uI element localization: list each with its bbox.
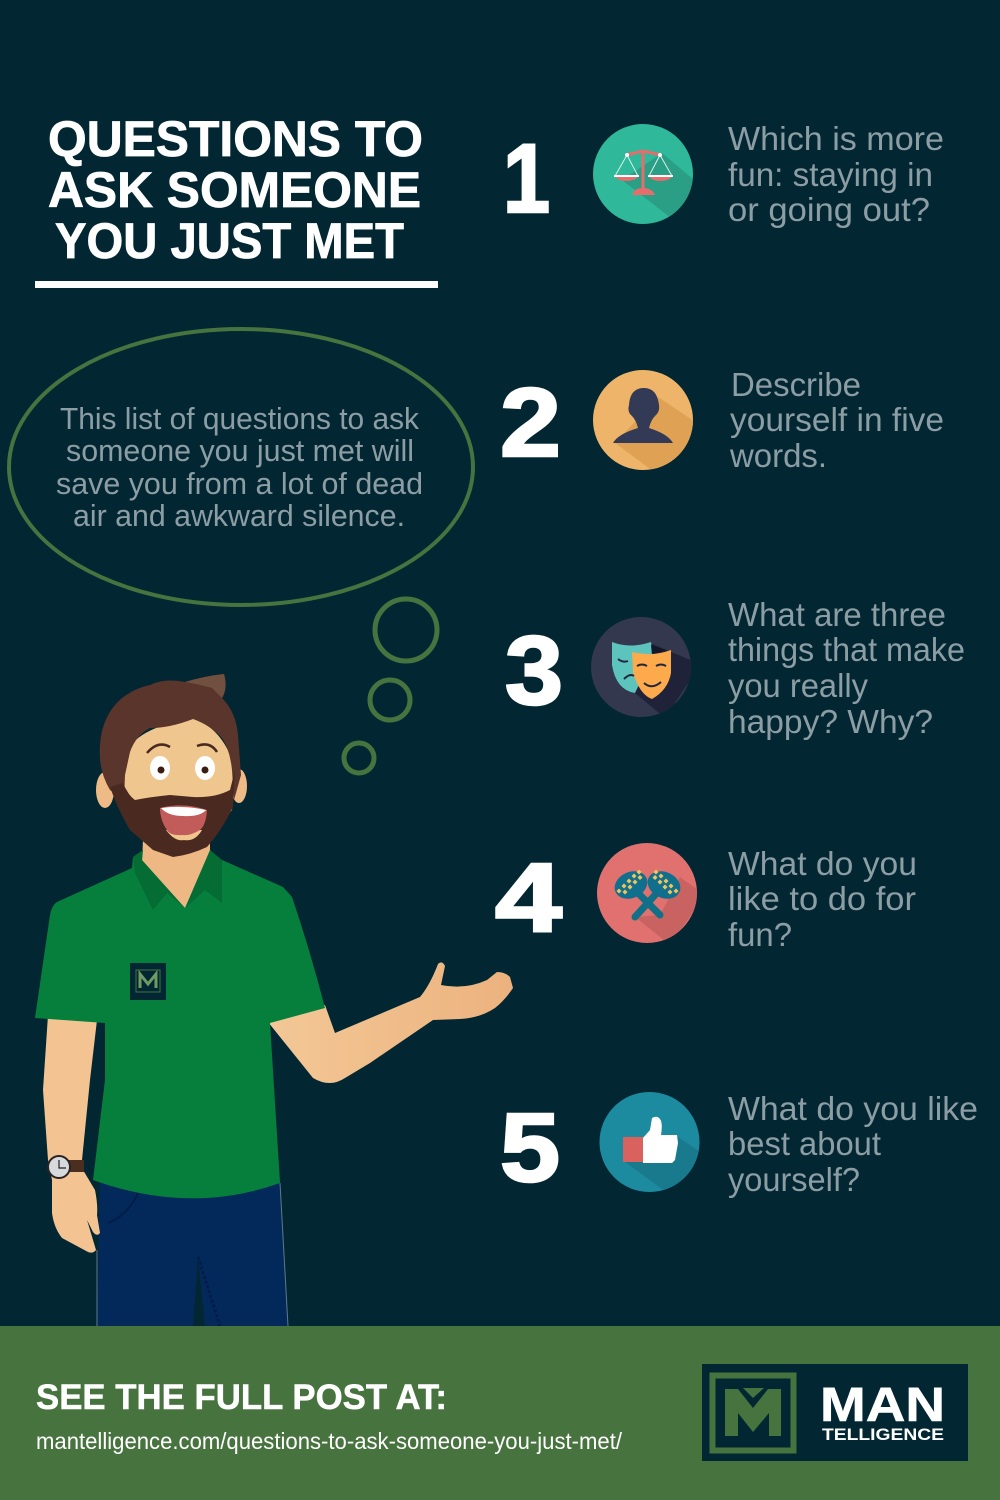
- question 3: [728, 596, 965, 740]
- logo: MAN: [820, 1379, 945, 1432]
- ears: [96, 769, 247, 808]
- character: man with beard: [35, 674, 513, 1326]
- title: QUESTIONS TO: [48, 111, 423, 167]
- question 1: [728, 120, 944, 228]
- title: ASK SOMEONE: [48, 162, 421, 218]
- thought bubble: [9, 329, 473, 605]
- number 4: 4: [495, 843, 562, 952]
- question 4: like to do for: [728, 880, 916, 917]
- thought bubble: save you from a lot of dead: [56, 466, 423, 501]
- icon: person silhouette: [593, 370, 693, 470]
- footer url: mantelligence.com/questions-to-ask-someone-you-just-met/: [36, 1428, 623, 1454]
- shirt logo patch: [130, 963, 166, 1000]
- question 2: Describe: [731, 366, 861, 403]
- question 4: [728, 845, 917, 953]
- logo: [702, 1364, 968, 1461]
- thought bubble: This list of questions to ask: [60, 401, 419, 436]
- collar: [133, 850, 222, 910]
- question 2: [729, 366, 944, 474]
- hair highlight: [185, 674, 226, 698]
- hair: [100, 674, 241, 800]
- watch: [48, 1156, 84, 1178]
- question 3: you really: [728, 667, 868, 704]
- title: YOU JUST MET: [55, 213, 404, 269]
- question 5: best about: [728, 1125, 881, 1162]
- number 2: 2: [500, 368, 561, 477]
- number 5: 5: [500, 1093, 560, 1202]
- right arm: [268, 962, 513, 1083]
- question 1: or going out?: [728, 191, 930, 228]
- icon: theatre masks: [591, 617, 695, 718]
- question 1: fun: staying in: [728, 156, 933, 193]
- pants: [97, 1175, 288, 1326]
- number 1: 1: [503, 124, 550, 233]
- shirt: [35, 857, 325, 1198]
- question 5: yourself?: [728, 1161, 860, 1198]
- item 4: [495, 843, 917, 953]
- icon: maracas: [597, 843, 705, 945]
- question 4: What do you: [728, 845, 917, 882]
- face: [120, 718, 235, 845]
- title: [35, 111, 438, 288]
- thought bubble: air and awkward silence.: [73, 498, 405, 533]
- beard: [110, 770, 235, 857]
- eyes: [147, 744, 217, 780]
- item 2: [502, 370, 942, 470]
- question 2: yourself in five: [730, 401, 944, 438]
- footer band: [0, 1326, 1000, 1500]
- question 3: things that make: [728, 631, 965, 668]
- neck: [142, 840, 210, 908]
- question 2: words.: [729, 437, 827, 474]
- question 5: [728, 1090, 978, 1198]
- item 5: [500, 1090, 978, 1202]
- number 3: 3: [505, 616, 563, 725]
- thought bubble trail: [344, 599, 437, 773]
- question 3: What are three: [728, 596, 946, 633]
- footer heading: SEE THE FULL POST AT:: [36, 1378, 447, 1417]
- left arm: [43, 1015, 100, 1253]
- question 3: happy? Why?: [728, 703, 933, 740]
- icon: thumbs up: [600, 1092, 705, 1195]
- question 5: What do you like: [728, 1090, 978, 1127]
- logo: TELLIGENCE: [822, 1425, 944, 1444]
- question 1: Which is more: [728, 120, 944, 157]
- item 3: [505, 596, 965, 740]
- mouth: [160, 805, 207, 840]
- icon: balance scale: [593, 124, 700, 225]
- thought bubble: someone you just met will: [66, 433, 414, 468]
- item 1: [503, 120, 944, 233]
- question 4: fun?: [728, 916, 792, 953]
